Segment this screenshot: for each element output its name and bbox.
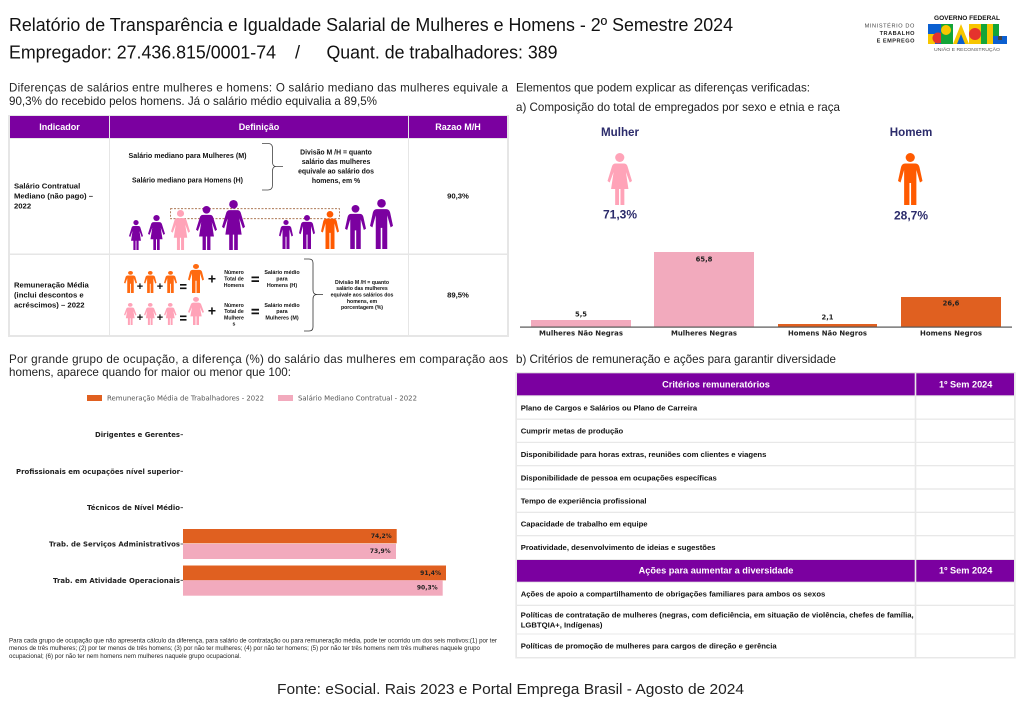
logos: ministry and government: GOVERNO FEDERAL	[934, 15, 1000, 22]
average pay definition: Homens	[224, 283, 244, 289]
panel: pay criteria and diversity actions table: Disponibilidade para horas extras, reuniões com clientes e viagens	[521, 450, 766, 459]
section heading: pay criteria: b) Critérios de remuneração e ações para garantir diversidade	[516, 353, 836, 366]
average pay definition: +	[157, 281, 163, 293]
panel: indicator table: (inclui descontos e	[14, 291, 84, 300]
panel: pay criteria and diversity actions table: Ações de apoio a compartilhamento de obrigações familiares para ambos os sexos	[521, 590, 825, 599]
average pay definition	[124, 259, 394, 331]
average pay definition: Total de	[224, 277, 244, 283]
panel: pay criteria and diversity actions table: Capacidade de trabalho em equipe	[521, 520, 648, 529]
section heading: pay gap by occupation: Por grande grupo de ocupação, a diferença (%) do salário das mulheres em comparação aos	[9, 353, 508, 366]
source line: Fonte: eSocial. Rais 2023 e Portal Emprega Brasil - Agosto de 2024	[277, 681, 744, 698]
median salary definition: salário das mulheres	[302, 159, 370, 166]
average pay definition: +	[137, 281, 143, 293]
average pay definition: equivale aos salários dos	[331, 293, 394, 299]
occupation axis labels: Dirigentes e Gerentes	[95, 431, 180, 439]
report title: /	[295, 42, 301, 62]
average pay definition: porcentagem (%)	[341, 305, 383, 311]
panel: indicator table	[8, 115, 509, 337]
report title	[9, 15, 733, 62]
average pay definition: para	[276, 277, 289, 283]
section heading: explanatory elements: a) Composição do total de empregados por sexo e etnia e raça	[516, 101, 841, 114]
icon: man	[898, 153, 922, 205]
icon row: women and men by salary	[129, 199, 393, 250]
average pay definition: para	[276, 309, 289, 315]
bar chart: workforce by sex and race	[520, 252, 1012, 338]
bar chart: pay gap by occupation group: 90,3%	[417, 585, 438, 592]
logos: ministry and government: TRABALHO	[880, 31, 915, 37]
occupation axis labels: Profissionais em ocupações nível superior	[16, 468, 181, 476]
median salary definition: equivale ao salário dos	[298, 169, 374, 176]
bar chart: workforce by sex and race: 2,1	[821, 314, 834, 322]
panel: indicator table: Remuneração Média	[14, 281, 89, 290]
panel: indicator table: 89,5%	[447, 291, 469, 300]
bar chart: workforce by sex and race: Mulheres Não Negras	[539, 330, 623, 338]
panel: pay criteria and diversity actions table: Políticas de contratação de mulheres (negras, com deficiência, em situação de violência, chefes de família,	[521, 611, 914, 620]
panel: indicator table: 2022	[14, 202, 31, 211]
occupation bars	[183, 529, 446, 596]
average pay definition: Homens (H)	[267, 283, 297, 289]
bar chart: workforce by sex and race: Mulheres Negras	[671, 330, 737, 338]
occupation axis labels: Técnicos de Nível Médio	[87, 504, 180, 512]
panel: indicator table: Indicador	[39, 122, 80, 132]
bar chart: workforce by sex and race: 5,5	[575, 310, 587, 318]
average pay definition: s	[233, 321, 236, 327]
footnote: menos de três mulheres; (2) por ter menos de três homens; (3) por não ter mulheres; (4) por não ter homens; (5) por não ter três homens nem três mulheres naquele grupo	[9, 645, 481, 652]
occupation axis labels	[16, 431, 183, 585]
occupation axis labels: Trab. de Serviços Administrativos	[49, 540, 180, 548]
logos: ministry and government: MINISTÉRIO DO	[865, 22, 915, 30]
panel: workforce by sex: 28,7%	[894, 208, 928, 222]
average pay definition: Número	[224, 270, 244, 276]
occupation axis labels: Trab. em Atividade Operacionais	[53, 577, 180, 585]
average pay definition: Salário médio	[264, 303, 300, 309]
panel: workforce by sex: Homem	[890, 126, 932, 139]
bar chart: pay gap by occupation group: 73,9%	[370, 548, 391, 555]
bar chart: workforce by sex and race: Homens Negros	[920, 330, 982, 338]
section heading: pay gap by occupation	[9, 353, 508, 379]
panel: pay criteria and diversity actions table: Tempo de experiência profissional	[521, 497, 647, 506]
panel: indicator table: Mediano (não pago) –	[14, 192, 94, 201]
average pay definition: salário das mulheres	[336, 286, 388, 292]
panel: pay criteria and diversity actions table: Disponibilidade de pessoa em ocupações específicas	[521, 473, 717, 482]
panel: pay criteria and diversity actions table: Cumprir metas de produção	[521, 427, 624, 436]
average pay definition: +	[137, 312, 143, 324]
panel: workforce by sex	[601, 126, 932, 222]
median salary definition: Divisão M /H = quanto	[300, 150, 372, 156]
panel: pay criteria and diversity actions table: Políticas de promoção de mulheres para cargos de direção e gerência	[521, 642, 777, 651]
average pay definition: +	[208, 270, 216, 286]
average pay definition: Número	[224, 303, 244, 309]
bar chart: workforce by sex and race: 26,6	[943, 300, 960, 308]
bar chart: pay gap by occupation group: 91,4%	[420, 570, 441, 577]
average pay definition: homens, em	[347, 299, 378, 305]
chart legend: Remuneração Média de Trabalhadores - 2022	[107, 394, 264, 402]
average pay definition: Total de	[224, 309, 244, 315]
panel: indicator table: Salário Contratual	[14, 182, 80, 191]
average pay definition: +	[208, 302, 216, 318]
panel: workforce by sex: 71,3%	[603, 208, 637, 222]
median salary definition	[128, 144, 374, 190]
panel: pay criteria and diversity actions table: Critérios remuneratórios	[662, 380, 770, 390]
chart legend	[87, 394, 417, 402]
footnote: Para cada grupo de ocupação que não apresenta cálculo da diferença, para salário de contratação ou para remuneração média, pode ter ocorrido um dos seis motivos:(1) por ter	[9, 638, 497, 645]
icon: woman	[608, 153, 632, 205]
average pay definition: Salário médio	[264, 270, 300, 276]
average pay definition: Mulheres (M)	[265, 315, 299, 321]
logos: ministry and government	[865, 15, 1007, 53]
report title: Quant. de trabalhadores: 389	[326, 42, 558, 62]
panel: indicator table: Definição	[239, 122, 280, 132]
panel: pay criteria and diversity actions table	[515, 372, 1016, 658]
footnote: ocupacional; (6) por não ter nem homens nem mulheres naquele grupo ocupacional.	[9, 653, 241, 660]
panel: pay criteria and diversity actions table: 1º Sem 2024	[939, 566, 993, 576]
median salary definition: Salário mediano para Homens (H)	[132, 178, 243, 184]
average pay definition: Divisão M /H = quanto	[335, 280, 389, 286]
panel: pay criteria and diversity actions table: 1º Sem 2024	[939, 380, 993, 390]
average pay definition: +	[157, 312, 163, 324]
panel: pay criteria and diversity actions table: Plano de Cargos e Salários ou Plano de Carreira	[521, 403, 698, 412]
median salary definition: homens, em %	[312, 178, 360, 185]
report title: Empregador: 27.436.815/0001-74	[9, 42, 276, 62]
bar chart: pay gap by occupation group: 74,2%	[371, 533, 392, 540]
intro text on salary differences: Diferenças de salários entre mulheres e homens: O salário mediano das mulheres equivale a	[9, 82, 509, 95]
panel: pay criteria and diversity actions table: LGBTQIA+, Indígenas)	[521, 621, 603, 630]
logos: ministry and government: UNIÃO E RECONSTRUÇÃO	[934, 46, 1000, 53]
chart legend: Salário Mediano Contratual - 2022	[298, 394, 417, 402]
panel: indicator table: Razao M/H	[435, 122, 481, 132]
bar chart: workforce by sex and race: Homens Não Negros	[788, 330, 867, 338]
panel: pay criteria and diversity actions table: Proatividade, desenvolvimento de ideias e sugestões	[521, 543, 716, 552]
section heading: explanatory elements: Elementos que podem explicar as diferenças verificadas:	[516, 82, 810, 95]
section heading: explanatory elements	[516, 82, 841, 114]
bar chart: workforce by sex and race: 65,8	[696, 256, 713, 264]
panel: indicator table: 90,3%	[447, 192, 469, 201]
footnote	[9, 638, 497, 660]
report title: Relatório de Transparência e Igualdade Salarial de Mulheres e Homens - 2º Semestre 2024	[9, 15, 733, 35]
panel: pay criteria and diversity actions table: Ações para aumentar a diversidade	[639, 566, 793, 576]
intro text on salary differences: 90,3% do recebido pelos homens. Já o salário médio equivalia a 89,5%	[9, 95, 377, 108]
median salary definition: Salário mediano para Mulheres (M)	[128, 153, 246, 160]
logos: ministry and government: E EMPREGO	[877, 38, 915, 44]
bar chart: pay gap by occupation group	[16, 394, 446, 596]
intro text on salary differences	[9, 82, 509, 108]
section heading: pay gap by occupation: homens, aparece quando for maior ou menor que 100:	[9, 366, 291, 379]
panel: workforce by sex: Mulher	[601, 126, 639, 139]
panel: indicator table: acréscimos) – 2022	[14, 301, 85, 310]
average pay definition: Mulhere	[224, 315, 244, 321]
